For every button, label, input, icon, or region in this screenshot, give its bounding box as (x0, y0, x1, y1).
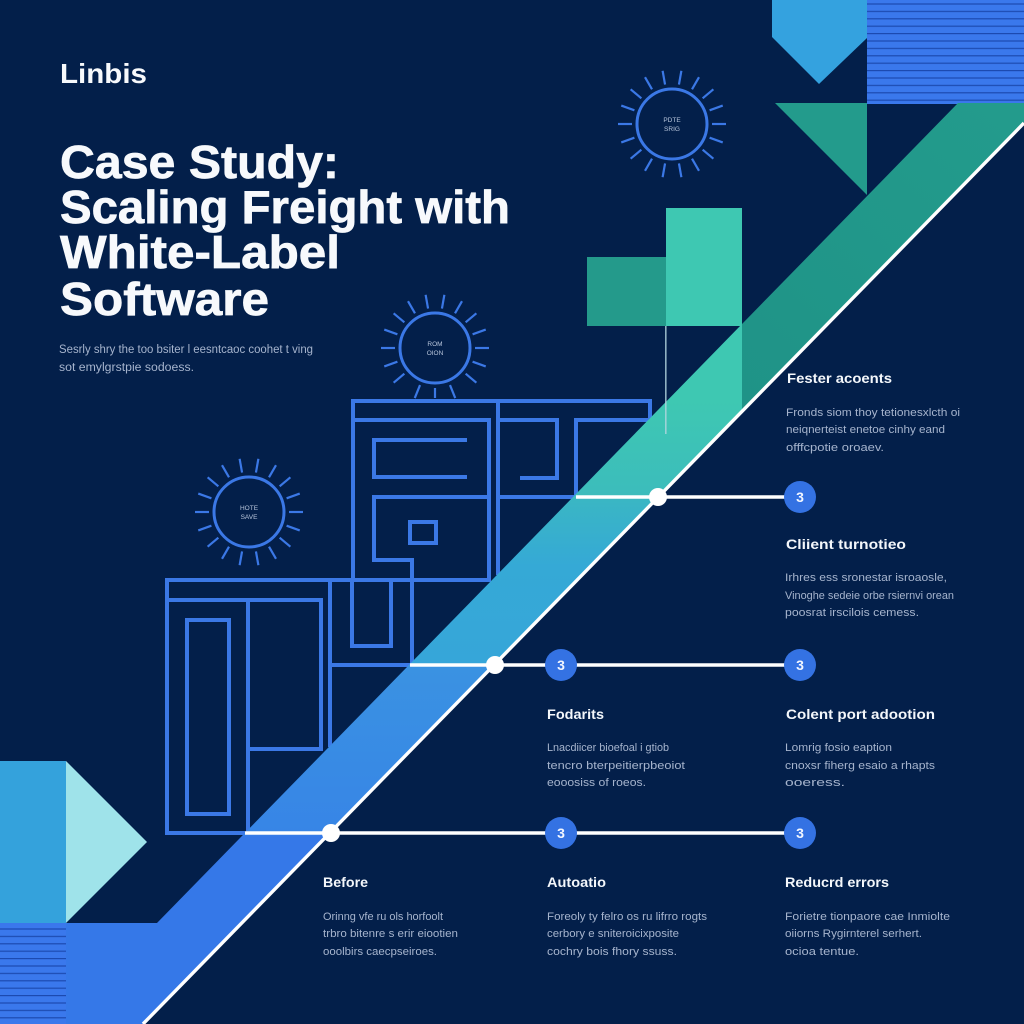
text block: Before (323, 875, 458, 958)
text block: Autoatio: Foreoly ty felro os ru lifrro rogts (547, 911, 708, 923)
flag: bright teal block (666, 208, 742, 326)
text block: Before: Orinng vfe ru ols horfoolt (323, 911, 443, 923)
outline building: upper (353, 401, 650, 665)
text block: Before: trbro bitenre s erir eiootien (323, 928, 458, 940)
text block: Reducrd errors: Reducrd errors (785, 875, 889, 890)
icon: sun top right: PDTE (663, 117, 681, 124)
text block: Fester acoents: Fronds siom thoy tetionesxlcth oi (786, 407, 960, 419)
text block: Colent port adootion: ooeress. (785, 777, 845, 789)
text block: Before: ooolbirs caecpseiroes. (323, 946, 437, 958)
title: Scaling Freight with (60, 181, 510, 233)
text block: Client turnotieo (785, 537, 954, 619)
text block: Reducrd errors: Forietre tionpaore cae Inmiolte (785, 911, 950, 923)
text block: Client turnotieo: Irhres ess sronestar isroaosle, (785, 572, 947, 584)
text block: Fester acoents: offfcpotie oroaev. (786, 442, 884, 454)
text block: Fester acoents: Fester acoents (787, 371, 892, 386)
number badge (545, 817, 577, 849)
bottom left square (0, 761, 66, 923)
text block: Autoatio: Autoatio (547, 875, 606, 890)
bottom left striped block (0, 923, 66, 1024)
text block: Reducrd errors: oiiorns Rygirnterel serhert. (785, 928, 922, 940)
bottom left light triangle (66, 761, 147, 923)
text block: Reducrd errors: ocioa tentue. (785, 946, 859, 958)
number badge: 3 (796, 825, 804, 841)
subtitle: sot emylgrstpie sodoess. (59, 362, 194, 374)
timeline rows (245, 497, 790, 833)
title: Software (60, 273, 269, 325)
text block: Fodarits: tencro bterpeitierpbeoiot (547, 760, 685, 772)
text block: Fodarits (547, 707, 685, 789)
text block: Fodarits: Fodarits (547, 707, 604, 722)
text block: Autoatio: cerbory e sniteroicixposite (547, 928, 679, 940)
top teal triangle (775, 103, 867, 195)
icon: sun top right: SRIG (664, 126, 680, 133)
text block: Fester acoents: neiqnerteist enetoe cinhy eand (786, 424, 945, 436)
text block: Colent port adootion (785, 707, 936, 789)
number badge: 3 (557, 657, 565, 673)
outline building: lower (167, 580, 412, 833)
number badge: 3 (796, 657, 804, 673)
text block: Colent port adootion: Lomrig fosio eaption (785, 742, 892, 754)
icon: sun top right (618, 71, 726, 177)
number badge: 3 (557, 825, 565, 841)
text block: Client turnotieo: Cliient turnotieo (786, 537, 906, 552)
diagonal band (66, 324, 742, 1024)
icon: sun left: HOTE (240, 505, 259, 512)
flag: dark teal block (587, 257, 666, 326)
text block: Reducrd errors (785, 875, 950, 958)
text block: Autoatio: cochry bois fhory ssuss. (547, 946, 677, 958)
text block: Before: Before (323, 875, 369, 890)
diagonal band: teal section (742, 103, 1024, 411)
title: White-Label (60, 226, 340, 278)
text block: Autoatio (547, 875, 708, 958)
icon: sun middle: ROM (427, 341, 443, 348)
text block: Client turnotieo: Vinoghe sedeie orbe rsiernvi orean (785, 590, 954, 602)
text block: Colent port adootion: Colent port adootion (786, 707, 935, 722)
number badge: 3 (796, 489, 804, 505)
icon: sun left: SAVE (241, 514, 258, 521)
text block: Fodarits: eooosiss of roeos. (547, 777, 646, 789)
text block: Client turnotieo: poosrat irscilois cemess. (785, 607, 919, 619)
diagonal white line (143, 123, 1024, 1024)
icon: sun left (195, 459, 303, 565)
subtitle: Sesrly shry the too bsiter l eesntcaoc coohet t ving (59, 344, 313, 356)
timeline dots (322, 488, 667, 842)
title (60, 136, 510, 325)
number badge (545, 649, 577, 681)
text block: Fodarits: Lnacdiicer bioefoal i gtiob (547, 742, 669, 754)
icon: sun middle: OION (427, 350, 444, 357)
number badge (784, 481, 816, 513)
flag pole (665, 326, 667, 434)
subtitle (59, 344, 313, 374)
number badge (784, 649, 816, 681)
text block: Colent port adootion: cnoxsr fiherg esaio a rhapts (785, 760, 936, 772)
icon: sun middle (381, 295, 489, 398)
top right striped block (867, 0, 1024, 104)
text block: Fester acoents (786, 371, 960, 454)
logo: Linbis (60, 58, 147, 89)
number badge (784, 817, 816, 849)
title: Case Study: (60, 136, 339, 188)
top right pentagon (772, 0, 867, 84)
